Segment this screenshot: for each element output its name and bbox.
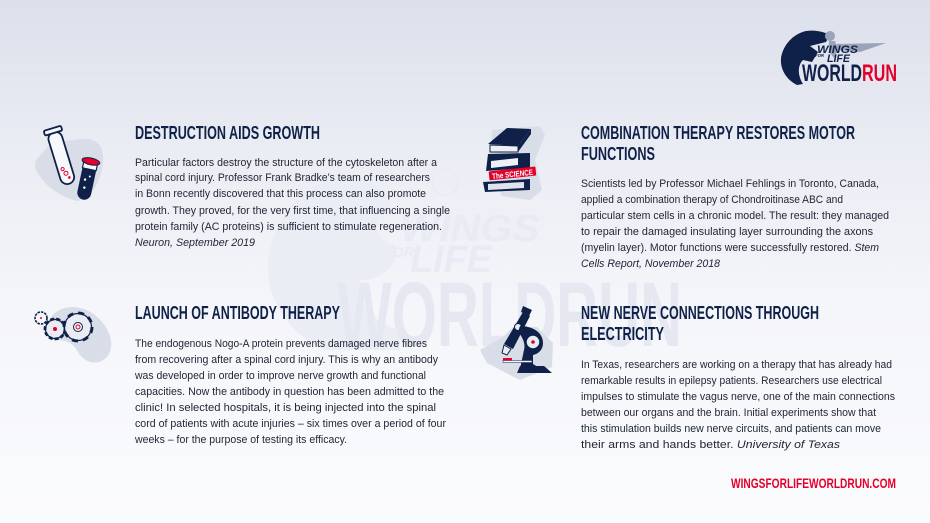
text block: capacities. Now the antibody in question has been admitted to the xyxy=(135,386,444,398)
icon: test tubes xyxy=(35,126,103,201)
heading: DESTRUCTION AIDS GROWTH xyxy=(135,122,320,143)
icon: stack of books: The SCIENCE xyxy=(492,168,534,181)
text block: from recovering after a spinal cord injury. This is why an antibody xyxy=(135,354,438,366)
text block: cord of patients with acute injuries – six times over a period of four xyxy=(135,418,446,430)
text block: weeks – for the purpose of testing its efficacy. xyxy=(134,434,347,446)
heading: NEW NERVE CONNECTIONS THROUGH xyxy=(581,302,819,323)
text block: growth. They proved, for the very first time, that influencing a single xyxy=(135,205,450,217)
text block: this stimulation builds new nerve circuits, and patients can move xyxy=(581,423,881,435)
text block: to repair the damaged insulating layer surrounding the axons xyxy=(581,226,873,238)
logo wordmark wings for life: FOR xyxy=(815,53,825,58)
heading xyxy=(581,122,855,164)
text block: impulses to stimulate the vagus nerve, one of the main connections xyxy=(581,391,895,403)
text block: Cells Report, November 2018 xyxy=(581,258,721,270)
heading: LAUNCH OF ANTIBODY THERAPY xyxy=(135,302,340,323)
logo figure and wing xyxy=(825,31,886,58)
icon: gears xyxy=(35,307,111,362)
heading: ELECTRICITY xyxy=(581,323,664,344)
heading: FUNCTIONS xyxy=(581,143,655,164)
text block: their arms and hands better. University of Texas xyxy=(581,439,841,451)
icon: stack of books xyxy=(483,126,545,200)
text block xyxy=(134,338,446,446)
text block: Scientists led by Professor Michael Fehlings in Toronto, Canada, xyxy=(581,178,879,190)
watermark logo: FOR xyxy=(384,244,414,261)
logo wordmark wings for life: WINGS xyxy=(817,44,859,56)
logo: Wings for Life World Run xyxy=(781,31,897,87)
text block xyxy=(581,178,889,270)
logo wordmark world run: WORLD xyxy=(802,60,862,87)
text block: protein family (AC proteins) is sufficient to stimulate regeneration. xyxy=(135,221,442,233)
heading xyxy=(581,302,819,344)
logo wordmark wings for life: LIFE xyxy=(827,53,851,65)
text block xyxy=(581,359,895,451)
icon: microscope xyxy=(480,306,553,380)
text block: applied a combination therapy of Chondroitinase ABC and xyxy=(581,194,843,206)
text block: particular stem cells in a chronic model. The result: they managed xyxy=(581,210,889,222)
text block: between our organs and the brain. Initial experiments show that xyxy=(581,407,876,419)
watermark logo: WINGS xyxy=(400,208,540,250)
text block: The endogenous Nogo-A protein prevents damaged nerve fibres xyxy=(135,338,427,350)
text block: clinic! In selected hospitals, it is being injected into the spinal xyxy=(135,402,436,414)
watermark logo: LIFE xyxy=(410,239,494,281)
logo wordmark wings for life xyxy=(815,44,859,65)
logo: Wings for Life World Run: RUN xyxy=(862,60,897,87)
panel: destruction aids growth xyxy=(35,122,450,249)
text block: Particular factors destroy the structure of the cytoskeleton after a xyxy=(135,157,438,169)
watermark logo xyxy=(268,169,682,366)
text block: In Texas, researchers are working on a therapy that has already had xyxy=(581,359,892,371)
watermark logo: WORLDRUN xyxy=(337,264,682,366)
text block: (myelin layer). Motor functions were successfully restored. Stem xyxy=(581,242,879,254)
text block: was developed in order to improve nerve growth and functional xyxy=(134,370,426,382)
text block: remarkable results in epilepsy patients. Researchers use electrical xyxy=(581,375,882,387)
panel: new nerve connections xyxy=(480,302,895,451)
text block: spinal cord injury. Professor Frank Bradke’s team of researchers xyxy=(135,172,430,184)
text block xyxy=(135,157,450,249)
text block: Neuron, September 2019 xyxy=(135,237,255,249)
text block: in Bonn recently discovered that this process can also promote xyxy=(135,188,426,200)
logo globe xyxy=(781,31,830,85)
panel: launch of antibody therapy xyxy=(35,302,446,446)
panel: combination therapy xyxy=(483,122,889,270)
